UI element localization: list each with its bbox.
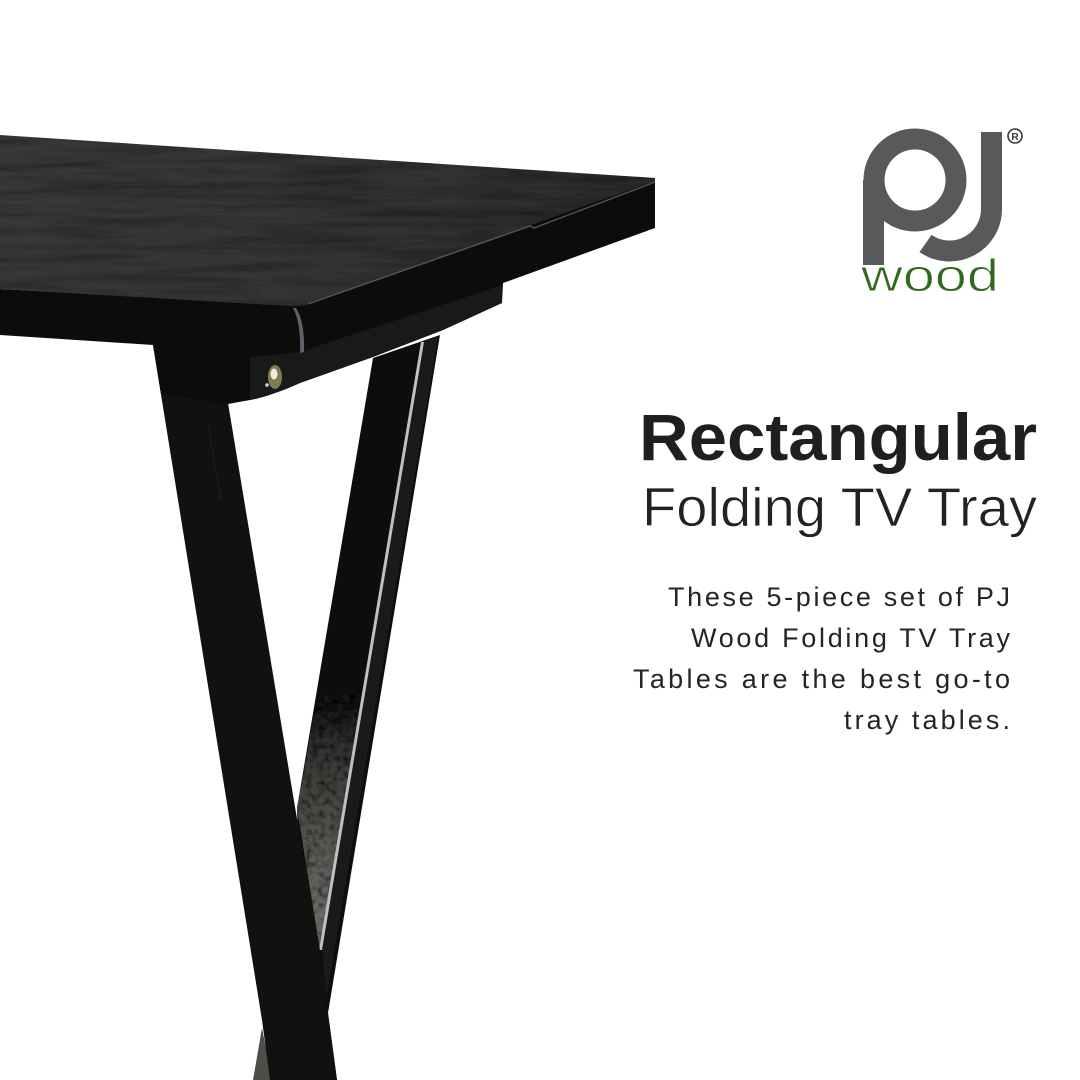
description text: tray tables.	[844, 705, 1010, 735]
rear leg outer strip	[322, 337, 438, 1000]
brand logo: PJ Wood	[860, 129, 1022, 301]
logo word wood: wood	[860, 250, 999, 301]
back leg lower stub	[253, 1028, 272, 1080]
apron lighter band	[250, 285, 502, 400]
description text: These 5-piece set of PJ	[668, 582, 1010, 612]
hinge screw	[265, 365, 282, 389]
description text: Wood Folding TV Tray	[691, 623, 1010, 653]
front leg	[153, 345, 337, 1080]
rear leg highlight line	[319, 342, 424, 950]
heading line 2: Folding TV Tray	[642, 476, 1038, 538]
table apron and edge	[0, 180, 655, 404]
rear leg inner face with worn texture	[297, 695, 362, 950]
heading	[639, 400, 1038, 538]
registered mark	[1008, 129, 1022, 143]
description text	[633, 582, 1010, 735]
logo letter p	[874, 139, 956, 265]
logo letter j	[926, 132, 992, 251]
registered mark: R	[1011, 132, 1019, 143]
description text: Tables are the best go-to	[633, 664, 1010, 694]
corner highlight	[293, 308, 304, 353]
front leg subtle inner line	[207, 425, 222, 500]
rear leg	[297, 335, 440, 1080]
heading line 1: Rectangular	[639, 400, 1037, 474]
product photo: folding tray table	[0, 135, 655, 1080]
front edge highlight	[308, 182, 655, 304]
table top surface	[0, 135, 655, 306]
